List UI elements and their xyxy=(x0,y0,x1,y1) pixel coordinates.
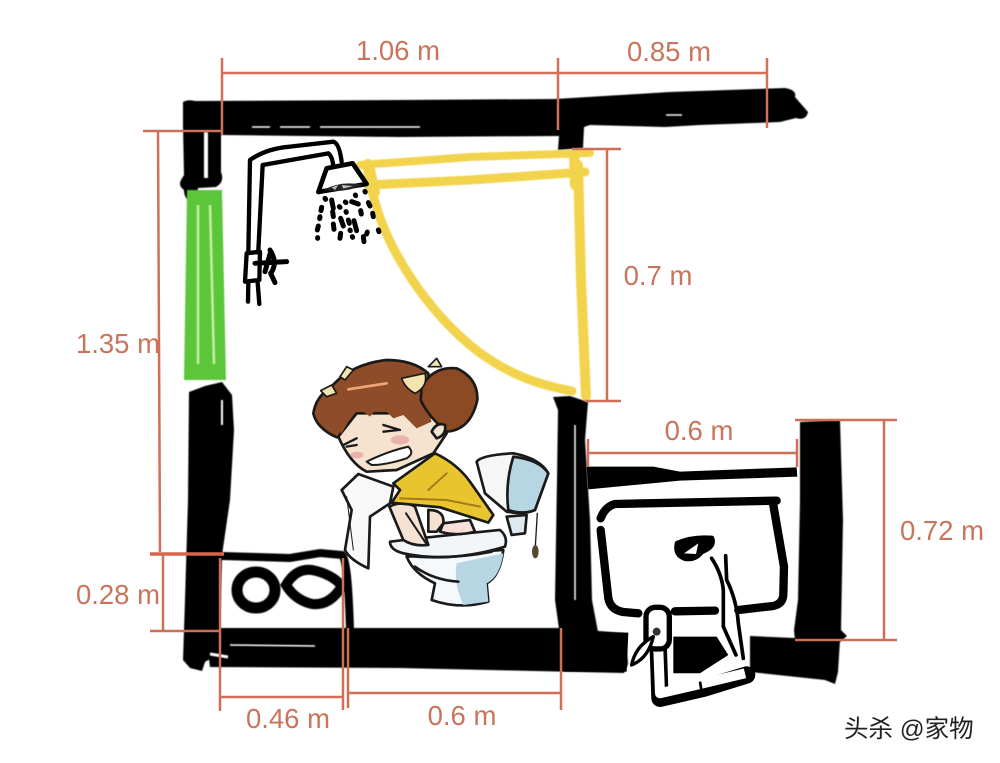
drain xyxy=(677,538,712,559)
faucet tubes xyxy=(712,556,743,658)
shower head xyxy=(318,163,367,192)
round basin xyxy=(237,572,275,608)
dimension labels: 1.06 m xyxy=(356,35,440,66)
base wall xyxy=(560,610,728,673)
oval basin xyxy=(286,570,342,604)
hair back xyxy=(313,360,430,437)
bun xyxy=(421,368,477,432)
dress fold xyxy=(400,473,480,507)
right wall xyxy=(794,420,847,642)
eyes and mouth xyxy=(343,425,400,447)
face xyxy=(338,413,447,472)
middle wall xyxy=(553,396,598,636)
dimension labels: 0.46 m xyxy=(246,703,330,734)
fringe xyxy=(327,377,432,433)
shower fixture xyxy=(245,142,379,304)
ear xyxy=(432,424,445,438)
right bottom wall xyxy=(750,636,840,684)
faucet xyxy=(632,607,747,698)
dimension labels: 0.28 m xyxy=(76,579,160,610)
watermark: 头杀 @家物 xyxy=(844,715,974,743)
dress xyxy=(392,453,493,523)
hair shine xyxy=(348,383,387,389)
lower left wall xyxy=(183,382,240,671)
hair ties xyxy=(321,358,442,397)
dimension labels: 1.35 m xyxy=(76,328,160,359)
dimension lines xyxy=(143,58,897,711)
water drops xyxy=(317,191,379,242)
bottom wall xyxy=(205,628,628,673)
walls xyxy=(180,88,847,684)
vanity top edge xyxy=(587,467,797,489)
toilet bowl xyxy=(390,530,506,605)
dimension labels: 0.7 m xyxy=(624,260,692,291)
mixer valve xyxy=(245,250,287,304)
toilet tank xyxy=(477,453,548,558)
yellow shower curtain xyxy=(360,153,590,396)
blush xyxy=(350,435,409,458)
paper towel xyxy=(342,474,393,568)
legs xyxy=(389,503,475,545)
dimension labels: 0.6 m xyxy=(428,700,496,731)
green window xyxy=(184,190,226,380)
dimension labels: 0.85 m xyxy=(627,36,711,67)
wall highlights xyxy=(210,115,682,657)
counter outline xyxy=(222,553,350,630)
washbasin area xyxy=(560,467,797,698)
basin xyxy=(601,501,784,613)
shower pipe xyxy=(248,142,342,253)
girl on toilet xyxy=(313,358,548,605)
dimension labels: 0.6 m xyxy=(665,415,733,446)
toilet paper counter xyxy=(222,553,350,630)
upper left wall stub xyxy=(180,125,222,201)
teeth xyxy=(367,447,411,465)
dimension labels: 0.72 m xyxy=(900,515,984,546)
top wall xyxy=(183,88,808,150)
